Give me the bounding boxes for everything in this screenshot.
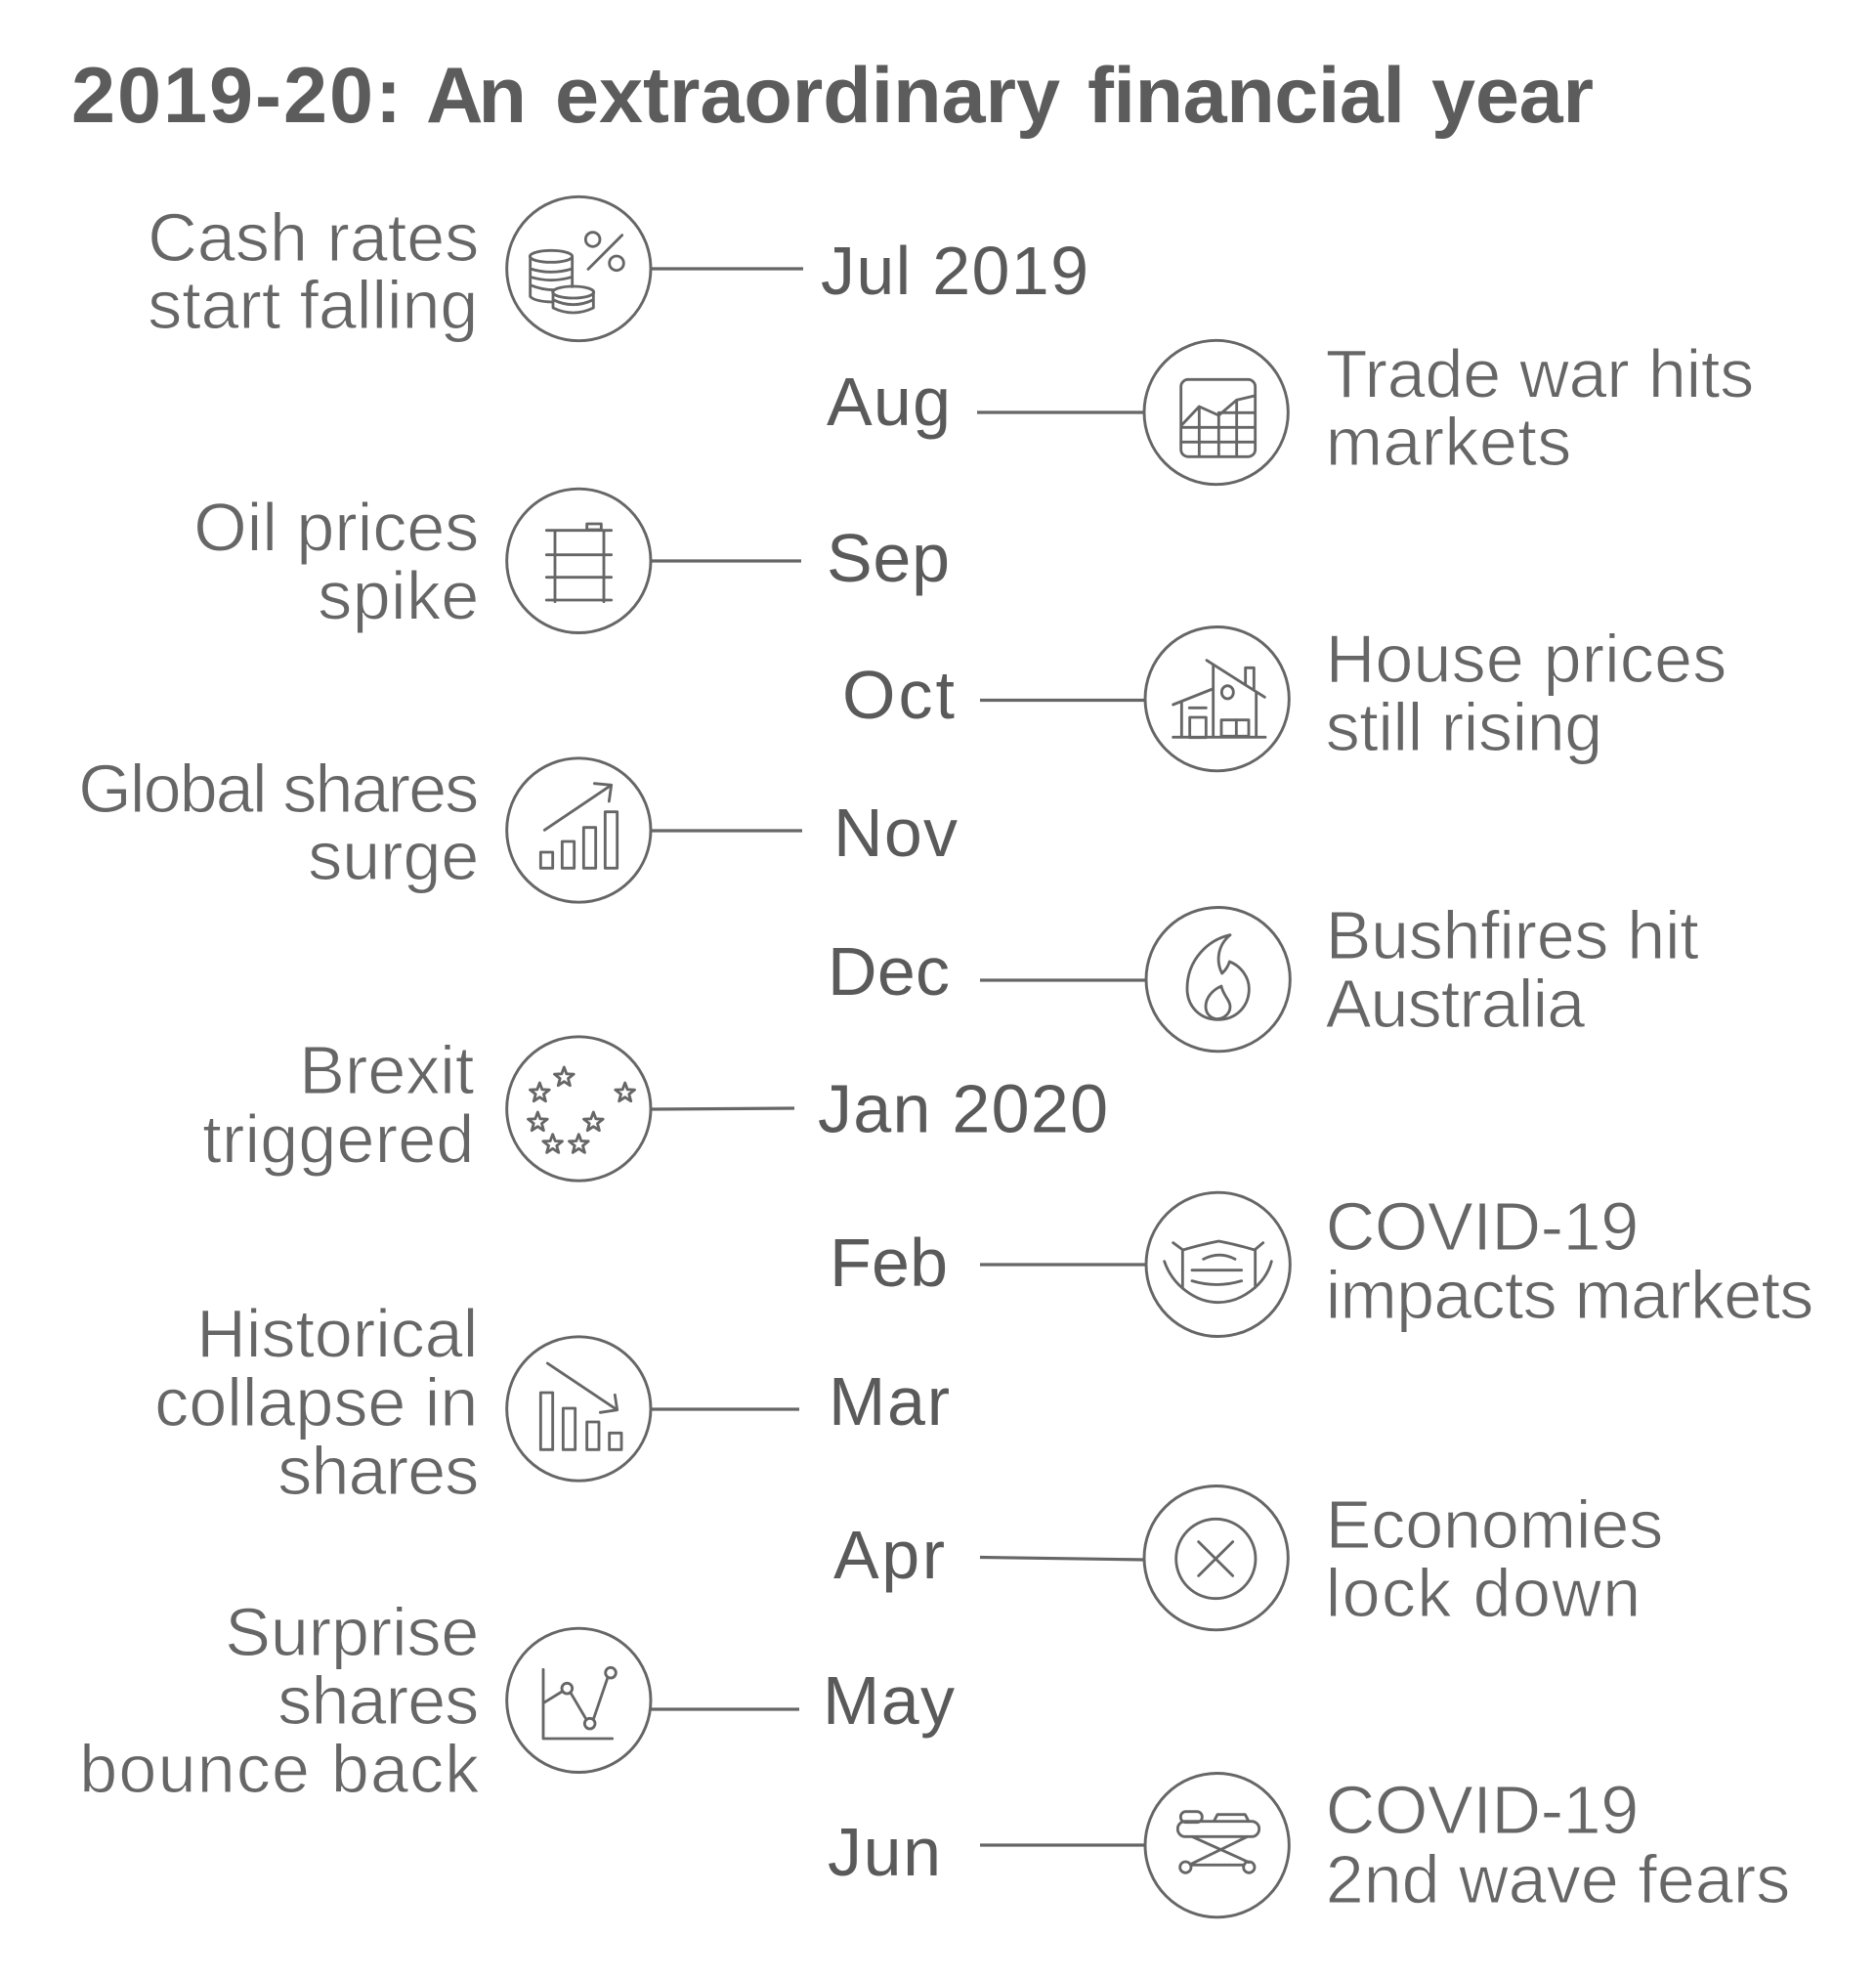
label: house prices still rising xyxy=(1326,621,1727,765)
event: oil prices, September xyxy=(193,489,801,633)
label: Brexit triggered: Brexit xyxy=(299,1032,474,1108)
month: Dec: Dec xyxy=(828,933,950,1010)
icon: oil barrel xyxy=(507,489,651,632)
label: economies lock down: Economies xyxy=(1326,1486,1663,1563)
label: surprise shares bounce back: bounce back xyxy=(79,1731,480,1807)
icon: market chart xyxy=(1144,340,1288,485)
connector: November xyxy=(651,829,802,833)
event: cash rates, July 2019 xyxy=(148,196,803,343)
connector: February xyxy=(980,1263,1147,1267)
title xyxy=(71,52,1594,140)
connector: August xyxy=(977,410,1143,414)
event: share collapse, March xyxy=(154,1296,799,1509)
month: Oct: Oct xyxy=(842,657,955,733)
month: Feb: Feb xyxy=(830,1225,948,1301)
label: global shares surge: Global shares xyxy=(78,751,479,827)
event: Brexit, January 2020 xyxy=(202,1032,794,1181)
label: Brexit triggered xyxy=(202,1032,474,1177)
icon: face mask xyxy=(1146,1192,1290,1336)
label: bushfires hit Australia xyxy=(1326,897,1699,1042)
label: cash rates start falling: Cash rates xyxy=(148,199,479,276)
connector: September xyxy=(651,559,801,563)
icon: EU stars xyxy=(507,1037,651,1181)
label: trade war hits markets xyxy=(1326,336,1754,480)
label: historical collapse in shares xyxy=(154,1296,479,1509)
label: cash rates start falling xyxy=(148,199,479,343)
label: economies lock down xyxy=(1326,1486,1663,1631)
month: May: May xyxy=(823,1662,955,1739)
title: extraordinary xyxy=(555,52,1060,140)
icon: line chart xyxy=(507,1628,651,1772)
icon: coins and percent xyxy=(507,196,651,341)
icon: flame xyxy=(1146,907,1290,1052)
label: house prices still rising: still rising xyxy=(1326,689,1602,765)
label: global shares surge: surge xyxy=(308,818,479,894)
label: COVID-19 impacts markets: impacts markets xyxy=(1326,1257,1813,1333)
event: COVID-19 impacts, February xyxy=(980,1188,1813,1336)
icon: crossed circle xyxy=(1144,1485,1288,1630)
title: financial xyxy=(1087,52,1405,140)
event: second wave fears, June xyxy=(980,1772,1790,1917)
month: Aug: Aug xyxy=(827,364,951,440)
label: historical collapse in shares: Historical xyxy=(196,1296,478,1372)
label: bushfires hit Australia: Bushfires hit xyxy=(1326,897,1699,973)
title: An xyxy=(426,52,527,140)
label: Brexit triggered: triggered xyxy=(202,1100,474,1177)
label: surprise shares bounce back xyxy=(79,1594,480,1807)
event: trade war, August xyxy=(977,336,1754,485)
icon: house xyxy=(1145,626,1289,771)
label: historical collapse in shares: collapse in xyxy=(154,1364,478,1441)
event: bushfires, December xyxy=(980,897,1699,1052)
icon: falling bars xyxy=(507,1337,651,1481)
label: COVID-19 2nd wave fears: COVID-19 xyxy=(1326,1772,1639,1848)
event: shares bounce back, May xyxy=(79,1594,799,1807)
connector: June xyxy=(980,1843,1145,1847)
label: global shares surge xyxy=(78,751,479,894)
label: COVID-19 2nd wave fears: 2nd wave fears xyxy=(1326,1841,1790,1917)
label: COVID-19 2nd wave fears xyxy=(1326,1772,1790,1917)
icon: rising bars xyxy=(507,758,651,902)
connector: January xyxy=(651,1108,794,1109)
connector: March xyxy=(651,1407,799,1411)
month: Apr: Apr xyxy=(833,1517,945,1593)
month: Jun: Jun xyxy=(828,1814,941,1890)
label: cash rates start falling: start falling xyxy=(148,267,478,343)
label: trade war hits markets: Trade war hits xyxy=(1326,336,1754,412)
connector: April xyxy=(980,1558,1145,1560)
label: oil prices spike xyxy=(193,489,479,633)
month: Jul 2019: Jul 2019 xyxy=(821,233,1088,309)
connector: December xyxy=(980,978,1147,982)
label: economies lock down: lock down xyxy=(1326,1555,1641,1631)
label: trade war hits markets: markets xyxy=(1326,404,1571,480)
connector: July xyxy=(651,267,803,271)
label: oil prices spike: spike xyxy=(318,557,479,633)
title: 2019-20: xyxy=(71,52,402,140)
month: Jan 2020: Jan 2020 xyxy=(818,1071,1108,1147)
label: bushfires hit Australia: Australia xyxy=(1326,966,1585,1042)
month: Sep: Sep xyxy=(827,520,950,596)
label: historical collapse in shares: shares xyxy=(277,1433,479,1509)
title: year xyxy=(1431,52,1594,140)
month: Nov: Nov xyxy=(833,795,958,871)
month: Mar: Mar xyxy=(829,1363,950,1440)
connector: May xyxy=(651,1707,799,1711)
event: global shares, November xyxy=(78,751,802,902)
event: house prices, October xyxy=(980,621,1727,771)
connector: October xyxy=(980,699,1145,702)
label: house prices still rising: House prices xyxy=(1326,621,1727,697)
event: lockdown, April xyxy=(980,1485,1663,1631)
label: COVID-19 impacts markets: COVID-19 xyxy=(1326,1188,1639,1265)
label: surprise shares bounce back: Surprise xyxy=(225,1594,479,1670)
label: surprise shares bounce back: shares xyxy=(277,1662,479,1739)
icon: hospital stretcher xyxy=(1145,1773,1289,1917)
label: COVID-19 impacts markets xyxy=(1326,1188,1813,1333)
label: oil prices spike: Oil prices xyxy=(193,489,479,565)
